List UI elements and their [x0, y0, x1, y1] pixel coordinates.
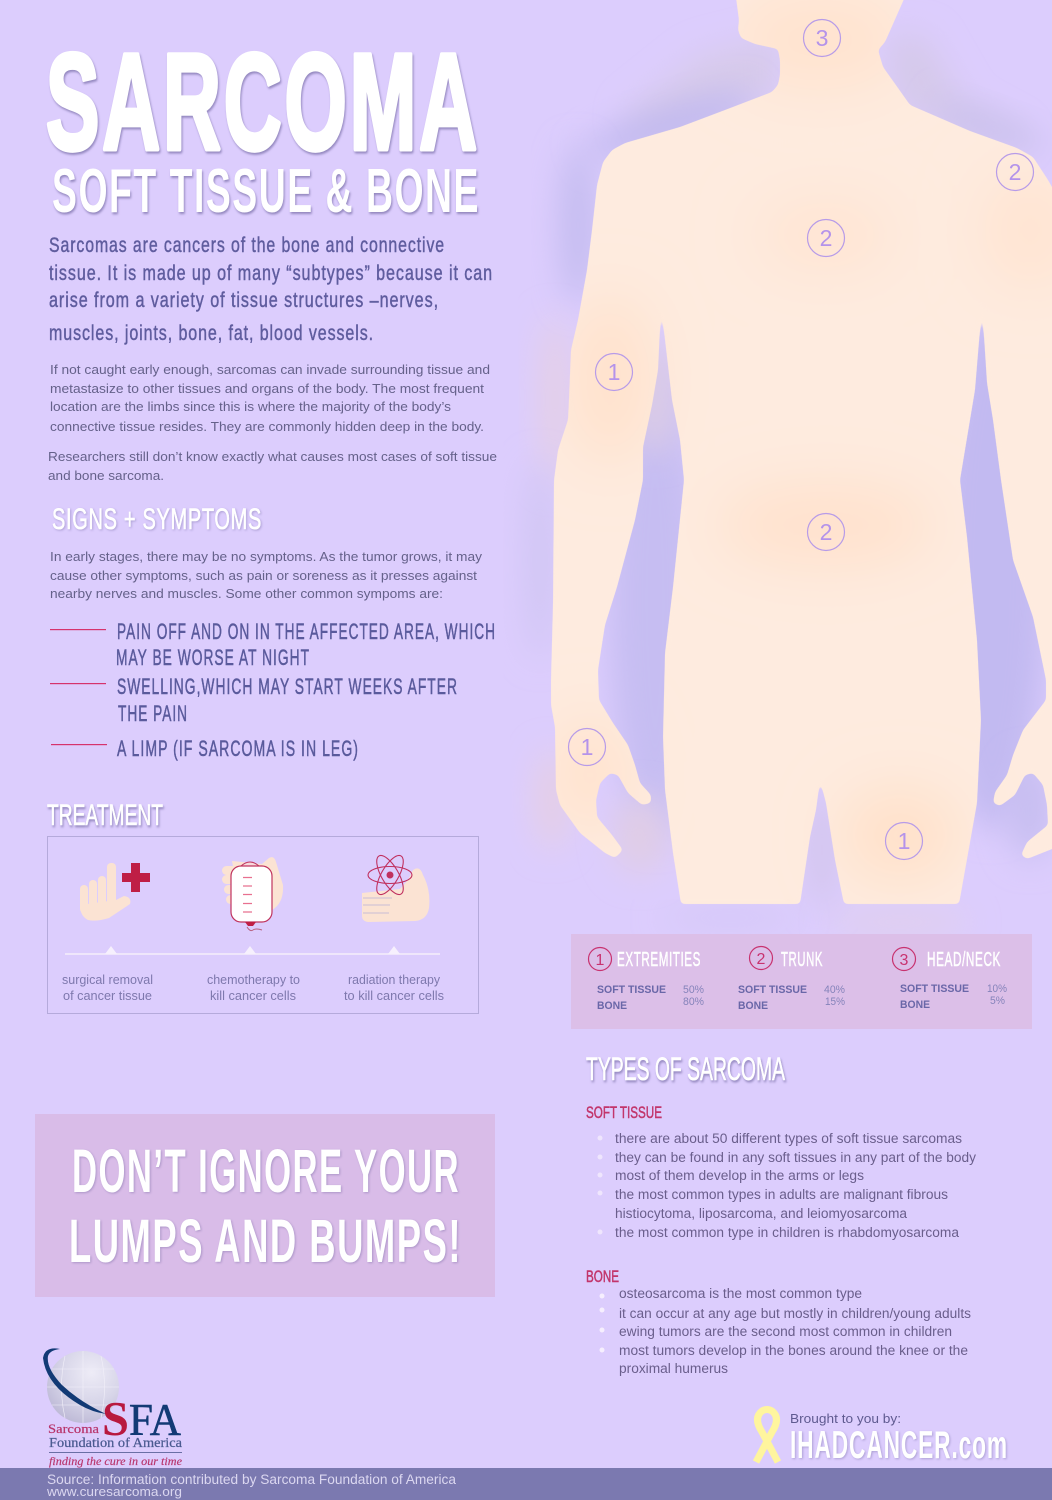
stat: trunk: BONE [738, 1000, 768, 1012]
title: SARCOMA [46, 26, 480, 179]
causes paragraph: and bone sarcoma. [48, 468, 164, 483]
logo: Sarcoma Foundation of America: FA [129, 1394, 181, 1445]
body location markers: 1 [608, 359, 620, 385]
title [46, 26, 480, 226]
stat: head and neck: 10% [987, 983, 1007, 995]
logo: Sarcoma Foundation of America: finding the cure in our time [49, 1456, 182, 1468]
bone list: ewing tumors are the second most common in children [619, 1324, 952, 1339]
treatment labels: to kill cancer cells [344, 989, 444, 1003]
stat: trunk: 2 [757, 951, 766, 968]
symptoms intro: In early stages, there may be no symptoms. As the tumor grows, it may [50, 549, 483, 564]
bone list: it can occur at any age but mostly in children/young adults [619, 1306, 971, 1321]
stat: head and neck: SOFT TISSUE [900, 983, 969, 995]
symptom list: MAY BE WORSE AT NIGHT [116, 645, 310, 670]
body location markers: 1 [581, 734, 593, 760]
description paragraph: connective tissue resides. They are commonly hidden deep in the body. [50, 419, 484, 434]
stat: extremities: EXTREMITIES [617, 949, 701, 971]
soft tissue list: histiocytoma, liposarcoma, and leiomyosarcoma [615, 1206, 907, 1221]
symptoms intro: cause other symptoms, such as pain or soreness as it presses against [50, 568, 477, 583]
intro text: tissue. It is made up of many “subtypes” because it can [49, 262, 493, 285]
soft tissue list: the most common type in children is rhabdomyosarcoma [615, 1225, 959, 1240]
description paragraph: metastasize to other tissues and organs of the body. The most frequent [50, 381, 484, 396]
description paragraph [50, 362, 490, 434]
stat: trunk: 40% [824, 984, 845, 996]
description paragraph: If not caught early enough, sarcomas can invade surrounding tissue and [50, 362, 490, 377]
treatment labels: chemotherapy to [207, 973, 300, 987]
intro text: muscles, joints, bone, fat, blood vessels. [49, 322, 374, 345]
treatment labels: radiation therapy [348, 973, 441, 987]
symptom list: THE PAIN [118, 701, 188, 726]
stat: trunk: 15% [825, 996, 845, 1008]
panel: treatment [48, 836, 478, 1014]
stat: extremities: BONE [597, 1000, 627, 1012]
title: SOFT TISSUE & BONE [52, 157, 480, 226]
callout banner [35, 1114, 495, 1297]
stat: extremities: SOFT TISSUE [597, 984, 666, 996]
logo: Sarcoma Foundation of America: Foundation of America [49, 1436, 183, 1451]
logo: Sarcoma Foundation of America [43, 1348, 183, 1468]
body silhouette [550, 0, 1052, 904]
stat: trunk: TRUNK [781, 949, 823, 971]
stat: head and neck: BONE [900, 999, 930, 1011]
symptom list [50, 619, 496, 761]
footer bar: Source: Information contributed by Sarcoma Foundation of America [47, 1472, 456, 1487]
intro text: Sarcomas are cancers of the bone and connective [49, 234, 445, 257]
icon: surgical hand [80, 863, 150, 921]
bone list [586, 1267, 971, 1376]
description paragraph: location are the limbs since this is where the majority of the body’s [50, 399, 452, 414]
bone list: most tumors develop in the bones around the knee or the [619, 1343, 968, 1358]
body location markers: 1 [898, 828, 910, 854]
stat: extremities: 50% [683, 984, 704, 996]
stat: extremities [588, 948, 704, 1012]
stat: trunk [738, 946, 845, 1012]
brought to you by [790, 1411, 1008, 1467]
soft tissue list: most of them develop in the arms or legs [615, 1168, 864, 1183]
stat: extremities: 80% [683, 996, 704, 1008]
symptoms intro [50, 549, 483, 601]
timeline [65, 946, 440, 955]
symptom list: SWELLING,WHICH MAY START WEEKS AFTER [117, 674, 458, 699]
footer bar [0, 1468, 1052, 1500]
brought to you by: Brought to you by: [790, 1411, 901, 1426]
stat: head and neck: 5% [990, 995, 1005, 1007]
panel: location statistics [571, 934, 1032, 1029]
soft tissue list: they can be found in any soft tissues in any part of the body [615, 1150, 976, 1165]
stat: head and neck: HEAD/NECK [927, 949, 1001, 971]
logo: Sarcoma Foundation of America: S [102, 1391, 129, 1446]
bone list: BONE [586, 1267, 619, 1286]
bone list: proximal humerus [619, 1361, 728, 1376]
callout banner: DON’T IGNORE YOUR [72, 1137, 460, 1205]
heading: treatment: TREATMENT [47, 799, 163, 832]
body location markers: 2 [820, 225, 832, 251]
stat: head and neck: 3 [900, 952, 909, 969]
symptom list: PAIN OFF AND ON IN THE AFFECTED AREA, WHICH [117, 619, 496, 644]
heading: types of sarcoma: TYPES OF SARCOMA [586, 1051, 785, 1087]
icon: chemotherapy bag [222, 857, 283, 931]
stat: extremities: 1 [596, 952, 605, 969]
soft tissue list: there are about 50 different types of soft tissue sarcomas [615, 1131, 962, 1146]
intro text: arise from a variety of tissue structures –nerves, [49, 289, 439, 312]
body glow and shadow [526, 35, 1052, 932]
heading: signs and symptoms: SIGNS + SYMPTOMS [52, 503, 262, 536]
intro text [49, 234, 493, 345]
treatment labels: of cancer tissue [63, 989, 152, 1003]
body location markers: 2 [820, 519, 832, 545]
stat: head and neck [892, 948, 1007, 1011]
treatment labels [62, 973, 444, 1003]
causes paragraph: Researchers still don’t know exactly what causes most cases of soft tissue [48, 449, 497, 464]
callout banner: LUMPS AND BUMPS! [69, 1207, 462, 1275]
bone list: osteosarcoma is the most common type [619, 1286, 862, 1301]
icon: radiation hand [362, 852, 429, 922]
body location markers: 3 [816, 25, 828, 51]
soft tissue list: the most common types in adults are malignant fibrous [615, 1187, 948, 1202]
causes paragraph [48, 449, 497, 483]
symptoms intro: nearby nerves and muscles. Some other common sympoms are: [50, 586, 443, 601]
footer bar: www.curesarcoma.org [46, 1484, 182, 1499]
treatment labels: surgical removal [62, 973, 153, 987]
icon: yellow ribbon [756, 1410, 778, 1462]
body location markers: 2 [1009, 159, 1021, 185]
logo: Sarcoma Foundation of America: Sarcoma [48, 1421, 99, 1436]
body location markers [568, 20, 1034, 860]
soft tissue list: SOFT TISSUE [586, 1103, 662, 1122]
soft tissue list [586, 1103, 976, 1240]
treatment labels: kill cancer cells [210, 989, 296, 1003]
symptom list: A LIMP (IF SARCOMA IS IN LEG) [117, 736, 359, 761]
stat: trunk: SOFT TISSUE [738, 984, 807, 996]
